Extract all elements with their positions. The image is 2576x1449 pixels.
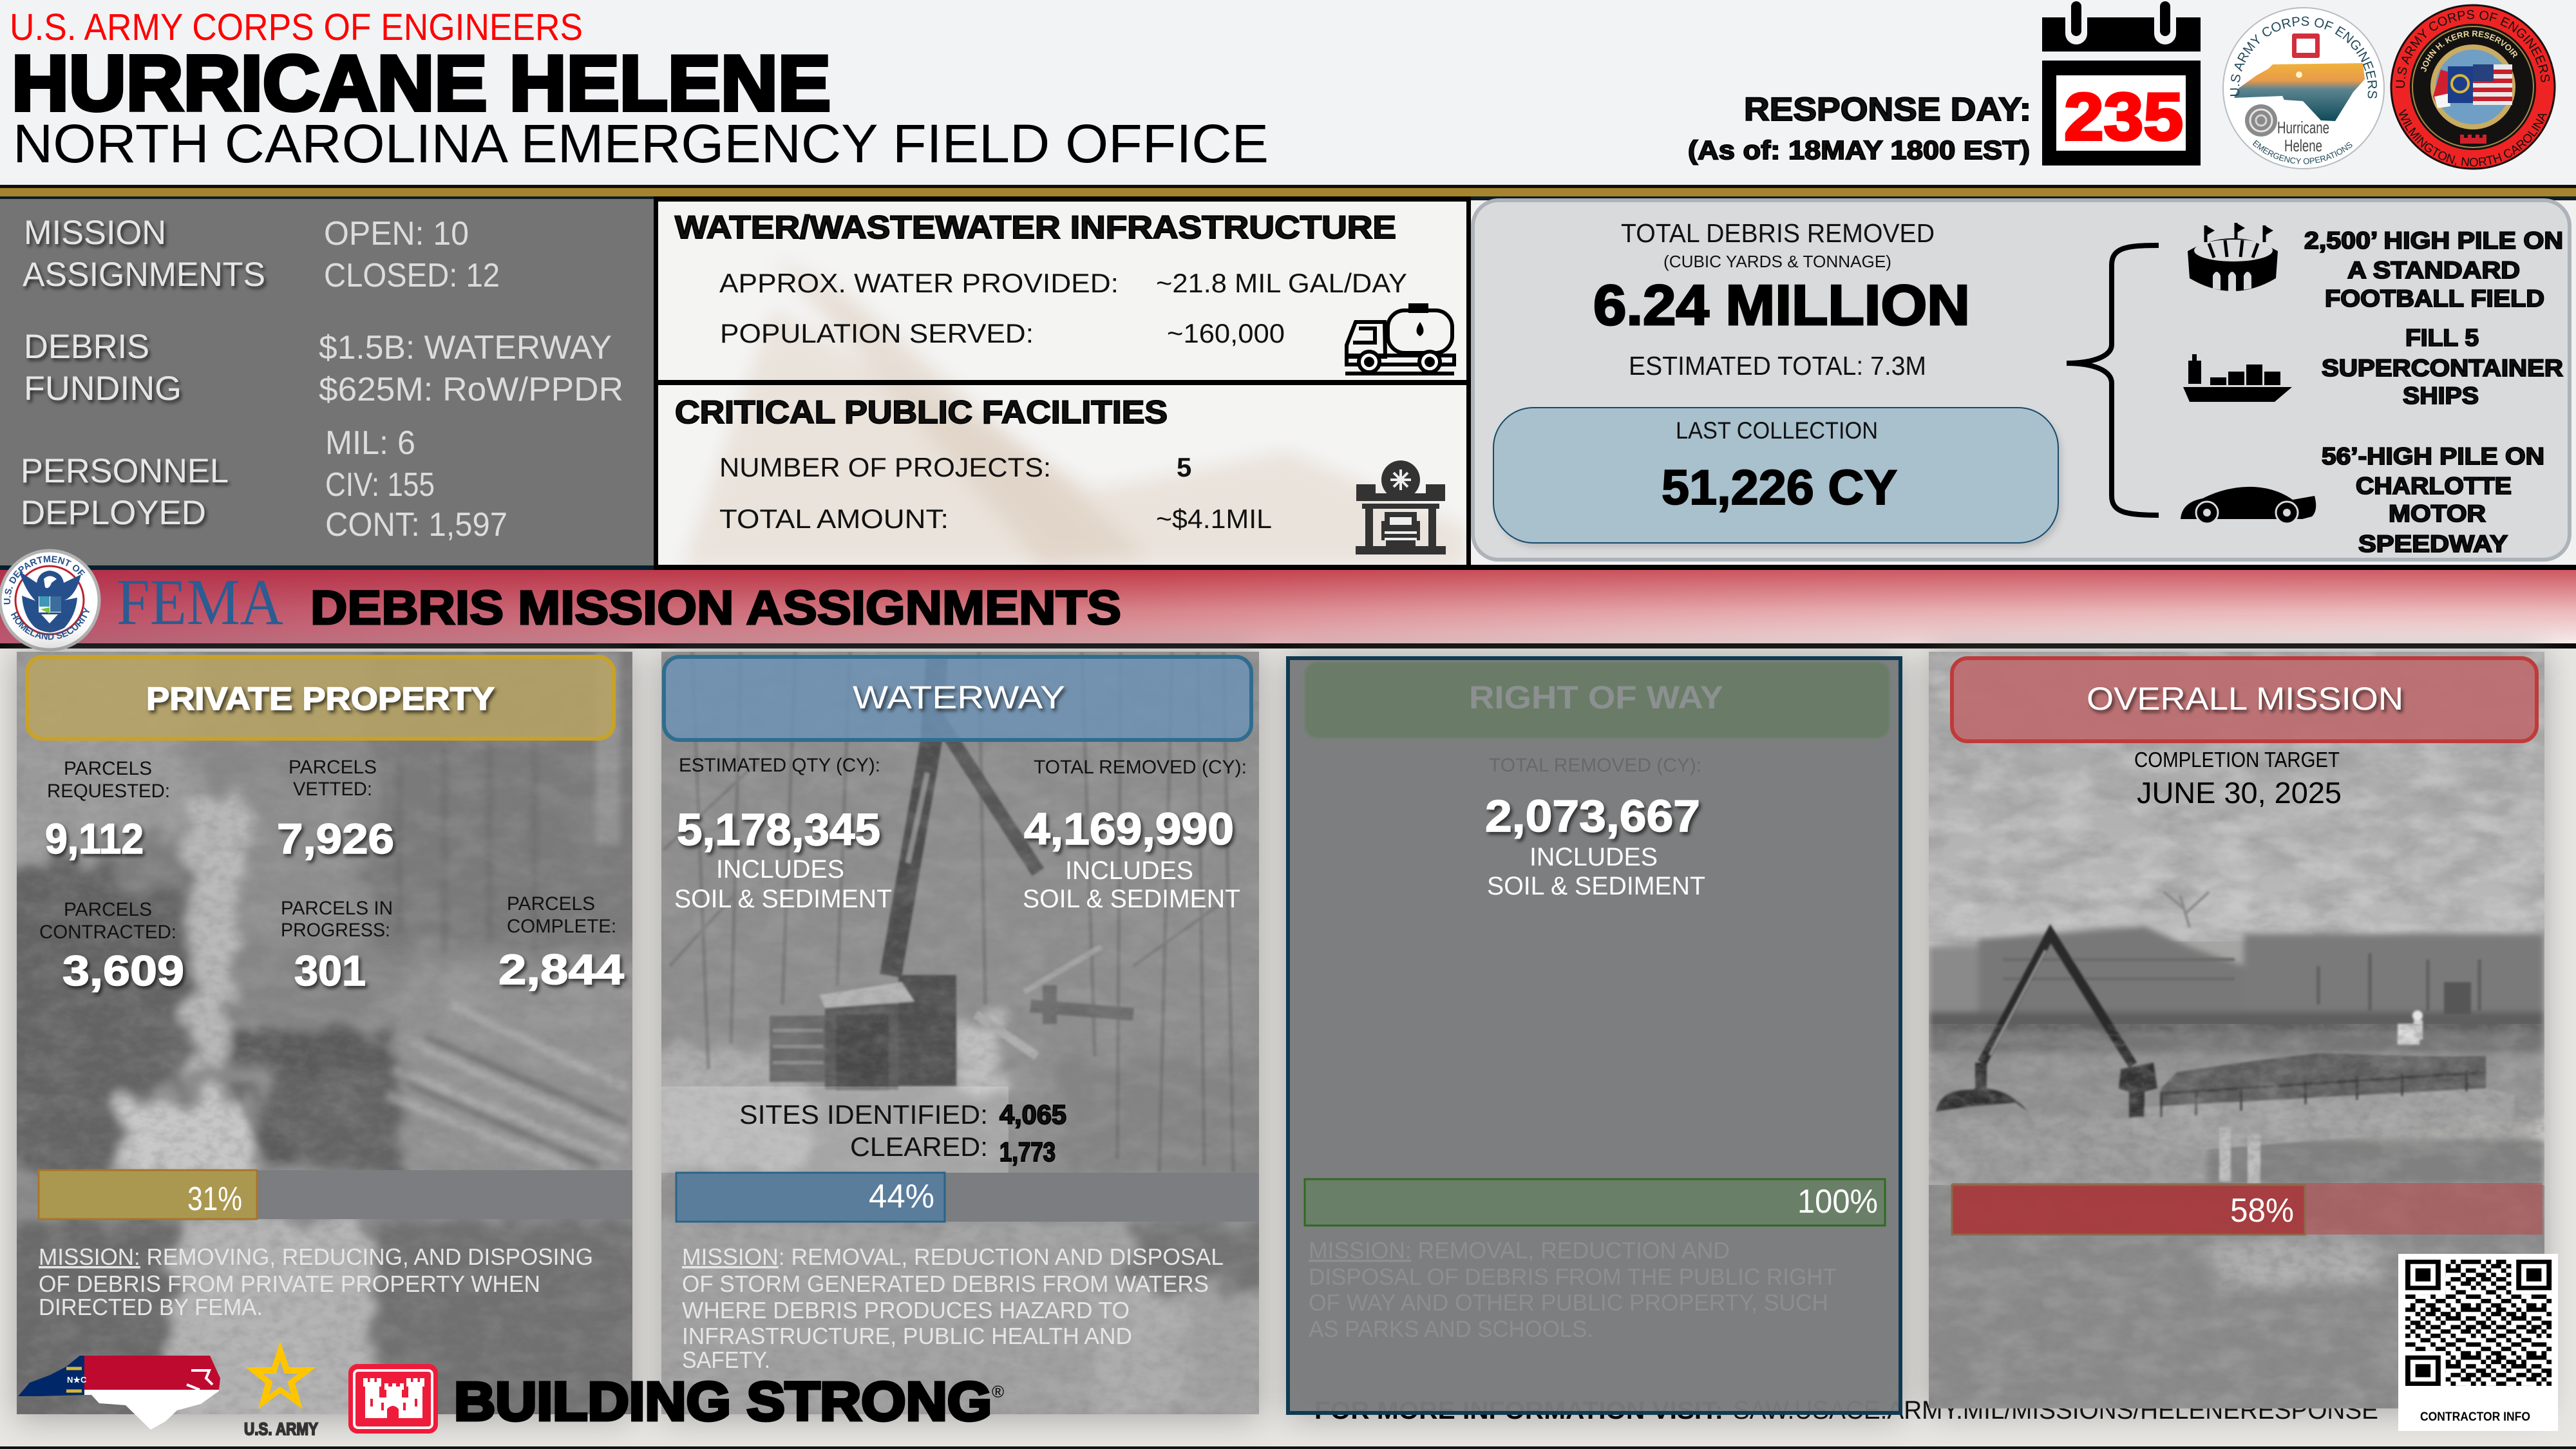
as-of timestamp: (As of: 18MAY 1800 EST) <box>1688 135 2030 165</box>
equivalence text: motor speedway: CHARLOTTE <box>2356 473 2512 499</box>
stat: parcels contracted: 3,609 <box>62 947 184 994</box>
logo: Wilmington district seal: WILMINGTON, NORTH CAROLINA <box>2399 109 2548 167</box>
equivalence text: motor speedway: SPEEDWAY <box>2358 531 2508 557</box>
stat: parcels complete <box>498 893 624 993</box>
logo: Wilmington district seal: JOHN H. KERR RESERVOIR <box>2421 31 2517 72</box>
mission statement: private property: MISSION: REMOVING, REDUCING, AND DISPOSING <box>39 1244 593 1270</box>
title: HURRICANE HELENE <box>12 39 831 127</box>
equivalence text: motor speedway: MOTOR <box>2389 500 2486 527</box>
completion target: COMPLETION TARGET <box>2134 748 2340 772</box>
registered mark: ® <box>992 1382 1004 1401</box>
stat: total removed <box>1023 757 1247 913</box>
panel: total debris removed <box>1471 200 2576 570</box>
panel shadows <box>17 652 2544 1418</box>
stat: parcels in progress <box>281 898 393 994</box>
header: waterway <box>664 657 1251 740</box>
equivalence text: container ships: FILL 5 <box>2405 325 2479 351</box>
equivalence text: football field: A STANDARD <box>2347 257 2520 283</box>
footer link text: SAW.USACE.ARMY.MIL/MISSIONS/HELENERESPONSE <box>1733 1396 2378 1425</box>
total amount row <box>719 504 1272 534</box>
debris funding values: $625M: RoW/PPDR <box>319 371 623 408</box>
photo: excavator in forest <box>644 652 1275 1421</box>
completion target: JUNE 30, 2025 <box>2137 776 2342 810</box>
header: right of way <box>1305 662 1889 738</box>
stat: parcels contracted: CONTRACTED: <box>39 922 176 943</box>
header: private property <box>27 657 614 739</box>
QR code: contractor info: CONTRACTOR INFO <box>2420 1410 2530 1424</box>
stat: parcels requested: 9,112 <box>45 815 144 862</box>
stat: parcels complete: COMPLETE: <box>507 916 616 937</box>
debris funding values <box>319 329 623 408</box>
equivalence text: container ships: SUPERCONTAINER <box>2322 355 2563 381</box>
mission statement: private property <box>39 1244 593 1320</box>
equivalence text: container ships <box>2322 325 2563 409</box>
stat: parcels in progress: 301 <box>294 947 366 994</box>
total debris heading: (CUBIC YARDS & TONNAGE) <box>1663 252 1891 271</box>
sites identified callout: 4,065 <box>999 1099 1066 1130</box>
icon: container ship <box>2183 354 2292 402</box>
Building Strong slogan: BUILDING STRONG <box>454 1371 992 1432</box>
header band <box>0 0 2576 185</box>
stat: parcels contracted: PARCELS <box>64 899 152 920</box>
header: overall mission: OVERALL MISSION <box>2087 681 2403 717</box>
progress bar: 44%: 44% <box>869 1178 934 1215</box>
heading: water infrastructure: WATER/WASTEWATER INFRASTRUCTURE <box>675 209 1396 245</box>
last collection box <box>1493 408 2061 547</box>
sites identified callout: 1,773 <box>999 1137 1056 1167</box>
stat: parcels complete: PARCELS <box>507 893 595 914</box>
icon: homeland security seal: HOMELAND SECURITY <box>10 607 90 640</box>
QR code: contractor info <box>2398 1254 2558 1431</box>
sites identified callout <box>661 1086 1066 1173</box>
mission statement: waterway: WHERE DEBRIS PRODUCES HAZARD TO <box>682 1297 1130 1323</box>
progress bar: 58%: 58% <box>2230 1192 2294 1229</box>
last collection box: 51,226 CY <box>1662 460 1897 515</box>
mission statement: waterway: OF STORM GENERATED DEBRIS FROM WATERS <box>682 1271 1209 1297</box>
total amount row: TOTAL AMOUNT: <box>719 504 949 534</box>
logo: Wilmington district seal: U.S ARMY CORPS OF ENGINEERS <box>2396 10 2550 88</box>
stat: parcels vetted: PARCELS <box>289 757 377 778</box>
stat: estimated quantity <box>674 755 892 913</box>
stat: total removed: 2,073,667 <box>1485 791 1700 841</box>
mission assignments values: CLOSED: 12 <box>324 257 500 294</box>
stat: estimated quantity: 5,178,345 <box>677 804 880 855</box>
number of projects row: 5 <box>1177 452 1191 482</box>
mission statement: private property: DIRECTED BY FEMA. <box>39 1294 263 1320</box>
stat: total removed: SOIL & SEDIMENT <box>1023 885 1240 913</box>
personnel deployed label: DEPLOYED <box>21 494 206 532</box>
equivalence text: motor speedway <box>2322 443 2544 557</box>
stat: parcels complete: 2,844 <box>498 945 624 993</box>
personnel deployed values: MIL: 6 <box>325 424 415 462</box>
mission statement: waterway: MISSION: REMOVAL, REDUCTION AND DISPOSAL <box>682 1244 1224 1270</box>
total amount row: ~$4.1MIL <box>1156 504 1272 534</box>
icon: homeland security seal <box>0 551 99 650</box>
stat: total removed: INCLUDES <box>1065 857 1193 885</box>
logo: Wilmington district seal <box>2391 5 2555 170</box>
organization line: U.S. ARMY CORPS OF ENGINEERS <box>10 6 583 48</box>
equivalence text: container ships: SHIPS <box>2403 383 2479 409</box>
logo: Hurricane Helene emergency operations: U.S ARMY CORPS OF ENGINEERS <box>2230 17 2378 99</box>
footer link text <box>1314 1396 2378 1425</box>
subtitle: NORTH CAROLINA EMERGENCY FIELD OFFICE <box>13 113 1269 174</box>
US Army wordmark: U.S. ARMY <box>244 1419 318 1439</box>
icon: race car <box>2181 487 2316 524</box>
logo: Hurricane Helene emergency operations: Hurricane <box>2277 118 2329 137</box>
photo: excavator clearing debris <box>0 644 647 1427</box>
mission assignments label: MISSION <box>24 214 166 252</box>
personnel deployed values: CIV: 155 <box>325 466 435 504</box>
icon: calendar with day count: 235 <box>2064 80 2183 155</box>
total debris heading: TOTAL DEBRIS REMOVED <box>1621 218 1935 248</box>
personnel deployed values <box>325 424 507 544</box>
water provided row: ~21.8 MIL GAL/DAY <box>1156 268 1407 298</box>
stat: total removed: 4,169,990 <box>1024 804 1234 854</box>
mission statement: waterway: INFRASTRUCTURE, PUBLIC HEALTH AND <box>682 1323 1132 1349</box>
equivalence text: football field: 2,500’ HIGH PILE ON <box>2304 227 2563 254</box>
progress bar: 31%: 31% <box>187 1180 242 1218</box>
equivalence text: football field: FOOTBALL FIELD <box>2325 285 2544 312</box>
number of projects row: NUMBER OF PROJECTS: <box>719 452 1051 482</box>
mission statement: right of way: DISPOSAL OF DEBRIS FROM THE PUBLIC RIGHT <box>1309 1264 1837 1290</box>
estimated total: ESTIMATED TOTAL: 7.3M <box>1629 351 1926 381</box>
number of projects row <box>719 452 1191 482</box>
stat: estimated quantity: INCLUDES <box>716 855 844 884</box>
stat: parcels vetted: VETTED: <box>293 779 372 800</box>
stat: parcels requested: PARCELS <box>64 758 152 779</box>
sites identified callout: CLEARED: <box>850 1132 988 1162</box>
stat: total removed: TOTAL REMOVED (CY): <box>1489 755 1701 776</box>
stat: estimated quantity: SOIL & SEDIMENT <box>674 885 892 913</box>
stat: parcels vetted: 7,926 <box>277 815 394 862</box>
stat: parcels contracted <box>39 899 184 994</box>
equivalence text: motor speedway: 56’-HIGH PILE ON <box>2322 443 2544 469</box>
progress bar: 44% <box>676 1173 1259 1222</box>
logo: Hurricane Helene emergency operations: EMERGENCY OPERATIONS <box>2253 140 2353 164</box>
stat: parcels in progress: PARCELS IN <box>281 898 393 919</box>
mission statement: waterway <box>682 1244 1224 1373</box>
debris total value: 6.24 MILLION <box>1593 273 1970 337</box>
mission statement: right of way <box>1309 1237 1837 1342</box>
icon: stadium <box>2188 223 2278 291</box>
logo: Hurricane Helene emergency operations: Helene <box>2284 136 2322 155</box>
stat: parcels in progress: PROGRESS: <box>281 920 390 941</box>
personnel deployed label: PERSONNEL <box>21 452 229 490</box>
panel: overall mission <box>1929 652 2544 1417</box>
icon: Army star <box>245 1341 316 1409</box>
panel: right of way <box>1288 658 1900 1413</box>
sites identified callout: SITES IDENTIFIED: <box>739 1099 988 1130</box>
mission statement: right of way: AS PARKS AND SCHOOLS. <box>1309 1316 1593 1342</box>
equivalence text: football field <box>2304 227 2563 312</box>
icon: water truck <box>1345 305 1454 374</box>
water provided row: APPROX. WATER PROVIDED: <box>719 268 1119 298</box>
stat: estimated quantity: ESTIMATED QTY (CY): <box>679 755 880 776</box>
header: overall mission <box>1952 658 2537 741</box>
header: right of way: RIGHT OF WAY <box>1469 679 1723 715</box>
gold divider bar <box>0 185 2576 200</box>
panel: waterway <box>644 652 1275 1421</box>
FEMA wordmark: FEMA <box>117 566 283 639</box>
stat: parcels vetted <box>277 757 394 862</box>
icon: homeland security seal: U.S. DEPARTMENT OF <box>4 555 85 604</box>
header: waterway: WATERWAY <box>853 679 1065 715</box>
banner heading: DEBRIS MISSION ASSIGNMENTS <box>310 581 1121 634</box>
logo: Hurricane Helene emergency operations <box>2223 8 2384 169</box>
debris funding label: DEBRIS <box>24 328 149 366</box>
stat: total removed: INCLUDES <box>1530 843 1658 871</box>
progress bar: 31% <box>39 1170 632 1219</box>
progress bar: 100%: 100% <box>1797 1183 1878 1220</box>
stat: total removed: SOIL & SEDIMENT <box>1487 872 1705 900</box>
stat: total removed <box>1485 755 1705 900</box>
mission assignments values <box>324 215 500 294</box>
debris funding values: $1.5B: WATERWAY <box>319 329 612 366</box>
footer link text: FOR MORE INFORMATION VISIT: <box>1314 1397 1723 1425</box>
mission assignments values: OPEN: 10 <box>324 215 469 252</box>
heading: critical public facilities: CRITICAL PUBLIC FACILITIES <box>675 394 1168 430</box>
mission statement: private property: OF DEBRIS FROM PRIVATE PROPERTY WHEN <box>39 1271 540 1297</box>
icon: fire station <box>1356 460 1446 554</box>
panel: water and public facilities <box>658 196 1471 570</box>
icon: North Carolina flag map <box>18 1356 220 1430</box>
progress bar: 100% <box>1305 1179 1885 1226</box>
logo: engineers castle <box>348 1364 438 1434</box>
last collection box: LAST COLLECTION <box>1676 417 1878 444</box>
total debris heading <box>1621 218 1935 271</box>
population served row: ~160,000 <box>1167 318 1285 348</box>
stat: total removed: TOTAL REMOVED (CY): <box>1034 757 1247 778</box>
banner: debris mission assignments <box>0 551 2576 650</box>
debris funding label: FUNDING <box>24 370 182 408</box>
photo: excavator on barge <box>1929 652 2544 1417</box>
personnel deployed values: CONT: 1,597 <box>325 506 507 544</box>
mission assignments label: ASSIGNMENTS <box>23 256 265 294</box>
mission statement: waterway: SAFETY. <box>682 1347 770 1373</box>
debris funding label <box>24 328 182 408</box>
bracket connector <box>2067 245 2159 515</box>
population served row: POPULATION SERVED: <box>720 318 1034 348</box>
stat: parcels requested: REQUESTED: <box>47 781 170 802</box>
response day label: RESPONSE DAY: <box>1744 91 2031 128</box>
stat: parcels requested <box>45 758 170 862</box>
mission statement: right of way: OF WAY AND OTHER PUBLIC PROPERTY, SUCH <box>1309 1289 1828 1316</box>
mission assignments label <box>23 214 265 294</box>
population served row <box>720 318 1285 348</box>
header: private property: PRIVATE PROPERTY <box>146 681 495 717</box>
mission statement: right of way: MISSION: REMOVAL, REDUCTION AND <box>1309 1237 1730 1264</box>
bottom edge <box>0 1446 2576 1449</box>
progress bar: 58% <box>1952 1183 2543 1235</box>
footer logos <box>18 1341 1004 1439</box>
personnel deployed label <box>21 452 229 532</box>
panel: private property <box>0 644 647 1427</box>
icon: calendar with day count <box>2042 6 2201 166</box>
icon: North Carolina flag map: N★C <box>67 1375 87 1385</box>
water provided row <box>719 268 1407 298</box>
completion target <box>2134 748 2342 810</box>
panel: mission summary <box>0 196 658 570</box>
